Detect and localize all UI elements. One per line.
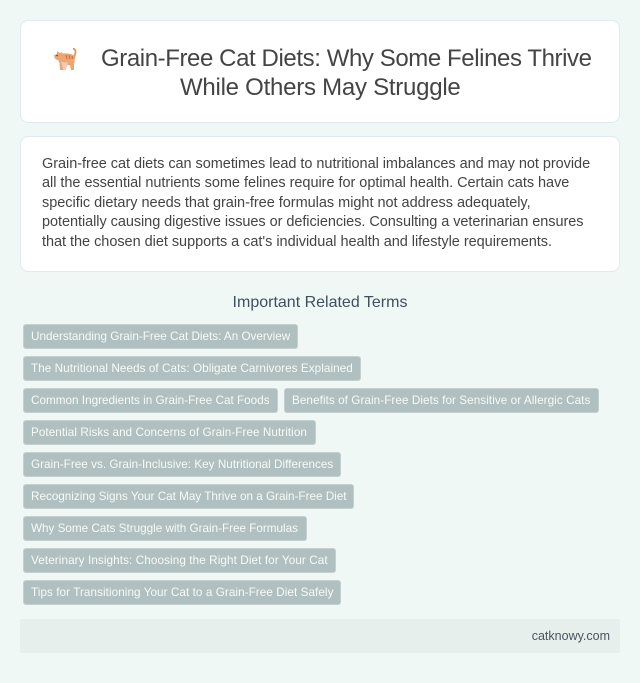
tag: Recognizing Signs Your Cat May Thrive on a Grain-Free Diet xyxy=(31,490,346,503)
tag xyxy=(23,388,278,413)
tag xyxy=(23,548,336,573)
tag: Tips for Transitioning Your Cat to a Grain-Free Diet Safely xyxy=(31,586,334,599)
heading: related terms: Important Related Terms xyxy=(233,294,407,311)
tag xyxy=(23,484,354,509)
summary text xyxy=(42,156,590,250)
tag: Understanding Grain-Free Cat Diets: An Overview xyxy=(31,330,290,343)
title: Grain-Free Cat Diets: Why Some Felines Thrive xyxy=(101,45,592,72)
summary text: Grain-free cat diets can sometimes lead to nutritional imbalances and may not provide xyxy=(42,156,590,172)
tag xyxy=(284,388,599,413)
summary text: potentially causing digestive issues or deficiencies. Consulting a veterinarian ensures xyxy=(42,214,583,230)
tag xyxy=(23,356,361,381)
tag xyxy=(23,324,298,349)
panel: title card xyxy=(20,20,620,123)
icon: cat xyxy=(54,48,76,70)
title: While Others May Struggle xyxy=(180,74,461,101)
tag: Common Ingredients in Grain-Free Cat Foods xyxy=(31,394,270,407)
tag: Potential Risks and Concerns of Grain-Free Nutrition xyxy=(31,426,307,439)
summary text: specific dietary needs that grain-free formulas might not address adequately, xyxy=(42,195,531,211)
tag xyxy=(23,420,316,445)
tag: The Nutritional Needs of Cats: Obligate Carnivores Explained xyxy=(31,362,353,375)
tag xyxy=(23,516,307,541)
summary text: that the chosen diet supports a cat's individual health and lifestyle requirements. xyxy=(42,234,552,250)
summary text: all the essential nutrients some felines require for optimal health. Certain cats have xyxy=(42,175,569,191)
tag: Why Some Cats Struggle with Grain-Free Formulas xyxy=(31,522,298,535)
footer bar xyxy=(20,619,620,653)
footer text: catknowy.com xyxy=(532,629,610,643)
title xyxy=(101,45,592,101)
panel: summary xyxy=(20,136,620,272)
tag list xyxy=(23,324,599,605)
tag: Veterinary Insights: Choosing the Right Diet for Your Cat xyxy=(31,554,328,567)
tag: Grain-Free vs. Grain-Inclusive: Key Nutritional Differences xyxy=(31,458,333,471)
tag xyxy=(23,580,341,605)
tag: Benefits of Grain-Free Diets for Sensitive or Allergic Cats xyxy=(292,394,590,407)
tag xyxy=(23,452,341,477)
